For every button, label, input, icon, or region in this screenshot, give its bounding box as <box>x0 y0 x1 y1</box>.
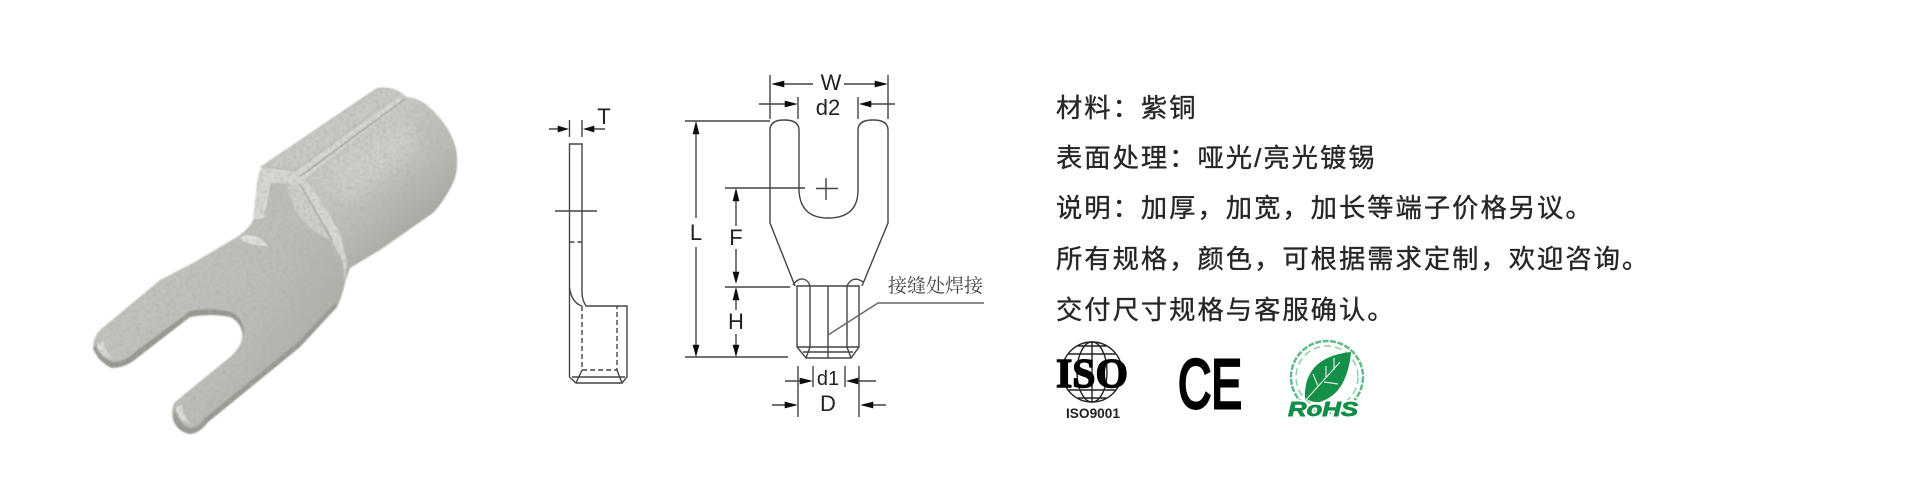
dimension W <box>770 70 888 119</box>
globe <box>1062 342 1122 402</box>
dimension D <box>772 366 886 417</box>
barrel seam <box>295 95 406 180</box>
fork shoulder highlight <box>238 235 268 246</box>
dimension d2 <box>759 95 895 120</box>
photo: copper fork terminal <box>93 88 457 434</box>
specification text block <box>1056 93 1650 325</box>
side view outline <box>570 144 627 383</box>
tine tip highlights <box>97 340 190 424</box>
side view drawing <box>549 104 627 383</box>
fork plate <box>93 215 345 434</box>
specification text block: 所有规格，颜色，可根据需求定制，欢迎咨询。 <box>1056 244 1650 274</box>
fork outline <box>770 120 888 286</box>
RoHS wordmark: RoHS <box>1288 399 1359 421</box>
weld label: 接缝处焊接 <box>888 275 984 297</box>
barrel outline <box>797 286 859 358</box>
specification text block: 材料：紫铜 <box>1056 93 1197 123</box>
dimension d1 <box>785 366 876 390</box>
specification text block: 表面处理：哑光/亮光镀锡 <box>1056 143 1377 173</box>
ISO 9001 logo <box>1056 342 1128 421</box>
dimension D: D <box>820 391 836 416</box>
dimension H: H <box>728 309 744 334</box>
dimension W: W <box>821 70 842 95</box>
barrel top face <box>262 89 398 170</box>
rim <box>253 167 347 283</box>
ring <box>1291 341 1363 413</box>
fork lower edge thickness <box>173 302 337 434</box>
surface grain <box>93 88 457 434</box>
dimension T <box>549 104 611 137</box>
ISO wordmark: ISO <box>1056 350 1128 396</box>
dimension H <box>725 287 790 356</box>
dimension F: F <box>729 225 743 250</box>
barrel highlight <box>330 118 420 205</box>
dimension T: T <box>597 104 611 129</box>
specification text block: 交付尺寸规格与客服确认。 <box>1056 295 1396 325</box>
specification text block: 说明：加厚，加宽，加长等端子价格另议。 <box>1056 193 1594 223</box>
barrel body <box>260 88 457 283</box>
dimension L: L <box>690 220 702 245</box>
RoHS logo <box>1288 341 1363 421</box>
ISO9001 caption: ISO9001 <box>1066 406 1120 421</box>
inner opening <box>263 183 330 240</box>
CE logo: CE <box>1178 345 1242 423</box>
weld leader line <box>828 303 984 335</box>
dimension F <box>725 188 805 283</box>
dimension d1: d1 <box>817 368 839 390</box>
leaf <box>1305 352 1351 402</box>
dimension L <box>685 121 788 357</box>
front view drawing <box>685 70 984 417</box>
dimension d2: d2 <box>816 95 840 120</box>
